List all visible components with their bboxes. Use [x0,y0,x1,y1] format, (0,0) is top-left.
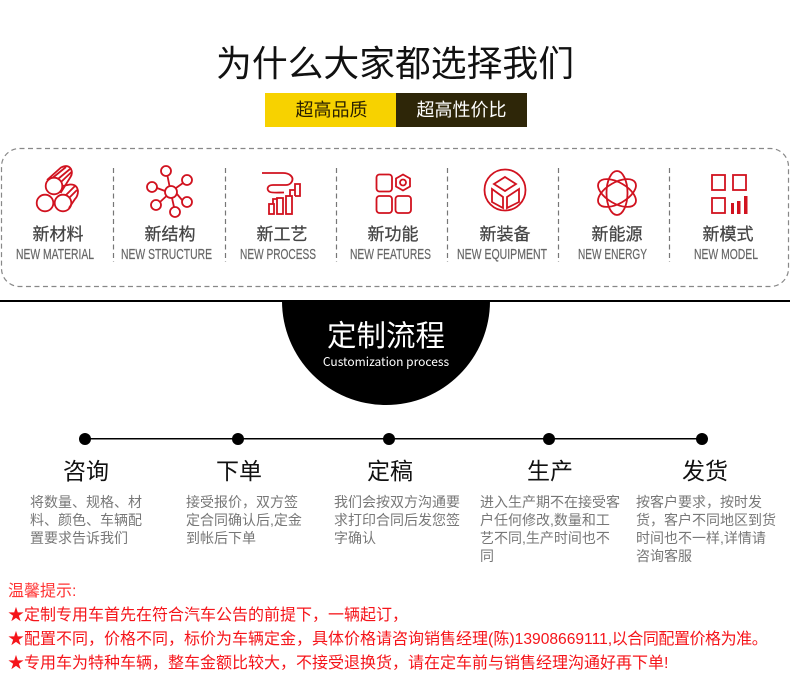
step 1 heading: 咨询 [63,458,109,484]
icon: process bars [262,173,300,214]
item: new equipment: 新装备 [480,225,530,244]
icon: squares and bars [712,175,748,214]
panel: seven new features [0,148,790,288]
badge: premium quality: 超高品质 [296,100,368,120]
item: new energy: NEW ENERGY [578,246,647,263]
step 3 text [334,494,460,546]
title: 为什么大家都选择我们 [216,44,574,84]
badge: premium quality [265,93,396,127]
step 2 text: 到帐后下单 [186,530,256,546]
badge: high value [396,93,527,127]
step 1 text [30,494,142,546]
item: new process: NEW PROCESS [240,246,316,263]
icon: pipes [37,166,78,211]
item: new energy: 新能源 [592,225,642,244]
step 4 text: 艺不同,生产时间也不 [480,530,610,546]
icon: atom [594,171,640,215]
section subtitle: Customization process [323,353,449,370]
step 5 text: 时间也不一样,详情请 [636,530,766,546]
step 4 text [480,494,620,564]
step 5 text [636,494,776,564]
step 3 text: 求打印合同后发您签 [334,512,460,528]
step 2 text: 定合同确认后,定金 [186,512,302,528]
item: new features: NEW FEATURES [350,246,431,263]
step 1 text: 料、颜色、车辆配 [30,512,142,528]
step 3 text: 字确认 [334,530,376,546]
item: new features: 新功能 [368,225,418,244]
step 4 text: 同 [480,548,494,564]
icon: feature tiles [376,174,411,213]
notice heading: 温馨提示: [8,583,76,600]
timeline [79,433,708,445]
step 4 text: 户任何修改,数量和工 [480,512,610,528]
step 1 text: 置要求告诉我们 [30,530,128,546]
notice line 1: ★定制专用车首先在符合汽车公告的前提下，一辆起订， [8,607,408,624]
step 1 text: 将数量、规格、材 [30,494,142,510]
item: new structure [121,166,212,263]
step 5 heading: 发货 [682,458,728,484]
divider line [0,300,790,302]
step 2 text [186,494,302,546]
item: new process [240,173,316,263]
item: new structure: 新结构 [144,225,196,244]
step 2 text: 接受报价，双方签 [186,494,298,510]
item: new model: NEW MODEL [694,246,758,263]
section title: 定制流程 [327,320,445,353]
step 4 heading: 生产 [527,458,573,484]
item: new structure: NEW STRUCTURE [121,246,212,263]
step 3 heading: 定稿 [367,458,413,484]
notice line 2: ★配置不同，价格不同，标价为车辆定金，具体价格请咨询销售经理(陈)13908669111,以合同配置价格为准。 [8,631,767,648]
item: new energy [578,171,647,263]
step 4 text: 进入生产期不在接受客 [480,494,620,510]
section header: customization process [282,301,490,405]
step 2 heading: 下单 [216,458,262,484]
icon: cube in circle [484,170,526,210]
step 5 text: 咨询客服 [636,548,692,564]
item: new model [694,175,758,263]
badge: high value: 超高性价比 [416,100,506,120]
notice line 3: ★专用车为特种车辆，整车金额比较大，不接受退换货，请在定车前与销售经理沟通好再下单! [8,655,668,672]
item: new material: 新材料 [32,225,84,244]
item: new process: 新工艺 [256,225,308,244]
step 5 text: 按客户要求，按时发 [636,494,762,510]
item: new equipment: NEW EQUIPMENT [457,246,547,263]
item: new model: 新模式 [702,225,754,244]
item: new equipment [457,170,547,263]
step 5 text: 货，客户不同地区到货 [636,512,776,528]
step 3 text: 我们会按双方沟通要 [334,494,460,510]
icon: network [147,166,192,217]
item: new material: NEW MATERIAL [16,246,94,263]
item: new material [16,166,94,263]
item: new features [350,174,431,263]
